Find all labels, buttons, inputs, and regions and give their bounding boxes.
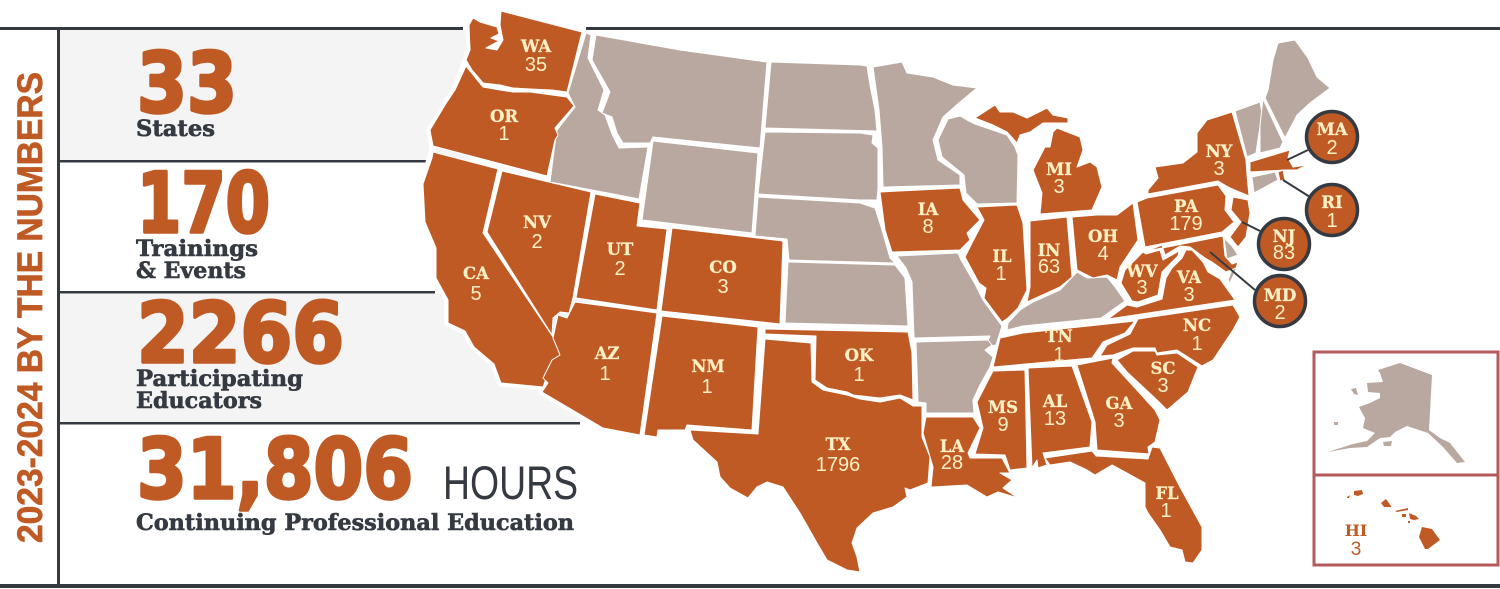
state: Florida bbox=[1045, 447, 1202, 563]
state: Virginia: VA bbox=[1176, 268, 1201, 287]
stat: 170 trainings and events: Trainings bbox=[136, 236, 258, 262]
state: Ohio: OH bbox=[1088, 227, 1118, 246]
state: Tennessee: 1 bbox=[1053, 344, 1065, 366]
callout: Maryland: MD bbox=[1264, 286, 1296, 305]
state: Oregon: 1 bbox=[498, 123, 510, 145]
state: California: 5 bbox=[470, 283, 482, 305]
state: New York: 3 bbox=[1213, 158, 1225, 180]
state: Pennsylvania bbox=[1137, 185, 1234, 247]
state: Pennsylvania: PA bbox=[1174, 197, 1198, 216]
state: Arizona bbox=[542, 302, 657, 435]
state: Illinois bbox=[965, 205, 1027, 322]
state: Texas bbox=[690, 339, 930, 572]
state: Rhode Island bbox=[1278, 170, 1285, 181]
map: states without events bbox=[550, 33, 1330, 413]
callout: Massachusetts bbox=[1287, 112, 1358, 162]
state: West Virginia: WV bbox=[1125, 262, 1159, 281]
stat: 31,806 hours: HOURS bbox=[443, 456, 578, 509]
state: Indiana: 63 bbox=[1038, 256, 1060, 278]
stat: 31,806 hours: 31,806 bbox=[137, 421, 413, 518]
state: Utah bbox=[576, 194, 667, 310]
state: North Carolina bbox=[1100, 305, 1240, 366]
state: South Carolina: 3 bbox=[1157, 375, 1169, 397]
callout: Maryland bbox=[1210, 252, 1306, 326]
state: Indiana: IN bbox=[1038, 241, 1060, 260]
state: Arizona: 1 bbox=[599, 363, 611, 385]
state: California bbox=[423, 152, 561, 387]
inset: Alaska bbox=[1328, 363, 1465, 463]
inset: Hawaii: 3 bbox=[1351, 539, 1361, 560]
state: Oregon bbox=[430, 66, 574, 176]
state: New Mexico bbox=[644, 316, 758, 437]
state: West Virginia bbox=[1121, 250, 1179, 302]
inset: Hawaii bbox=[1345, 490, 1440, 560]
state: Utah: UT bbox=[607, 240, 634, 259]
stat: 2266 participating educators bbox=[136, 285, 344, 414]
state: Virginia: 3 bbox=[1183, 284, 1195, 306]
inset: Hawaii: HI bbox=[1345, 521, 1367, 540]
stat: 170 trainings and events: & Events bbox=[136, 258, 246, 284]
state: Oregon: OR bbox=[490, 107, 518, 126]
state: Alabama: 13 bbox=[1044, 408, 1066, 430]
callout: Maryland: 2 bbox=[1274, 302, 1286, 324]
state: Iowa: IA bbox=[918, 200, 938, 219]
state: Michigan bbox=[975, 105, 1102, 214]
state: Georgia: GA bbox=[1106, 394, 1133, 413]
state: Florida: 1 bbox=[1160, 500, 1172, 522]
state: Nevada: NV bbox=[523, 213, 552, 232]
state: Virginia bbox=[1108, 250, 1235, 319]
state: Georgia bbox=[1077, 358, 1160, 454]
state: Washington: 35 bbox=[525, 54, 547, 76]
state: Pennsylvania: 179 bbox=[1169, 213, 1203, 235]
state: Tennessee bbox=[993, 321, 1135, 367]
state: Louisiana bbox=[923, 417, 1018, 498]
inset frame: Alaska and Hawaii bbox=[1314, 352, 1498, 565]
map: states with events bbox=[423, 11, 1307, 572]
state: Georgia: 3 bbox=[1113, 410, 1125, 432]
state: Colorado: 3 bbox=[717, 276, 729, 298]
state: Illinois: IL bbox=[992, 247, 1012, 266]
state: Ohio: 4 bbox=[1097, 243, 1109, 265]
state: Texas: 1796 bbox=[816, 454, 860, 476]
state: Mississippi bbox=[975, 370, 1027, 470]
callout: Rhode Island: 1 bbox=[1326, 210, 1338, 232]
stat: 31,806 hours bbox=[136, 421, 578, 536]
state: Oklahoma: 1 bbox=[853, 364, 865, 386]
state: Florida: FL bbox=[1155, 484, 1179, 503]
state: Oklahoma bbox=[765, 329, 913, 400]
state: Washington: WA bbox=[520, 37, 551, 56]
panel: states row background bbox=[60, 30, 470, 160]
state: Colorado bbox=[661, 228, 783, 324]
state: Colorado: CO bbox=[709, 258, 737, 277]
state: Oklahoma: OK bbox=[845, 346, 874, 365]
state: Arizona: AZ bbox=[594, 344, 619, 363]
stat: 170 trainings and events bbox=[136, 155, 270, 284]
state: Michigan: MI bbox=[1046, 160, 1072, 179]
state: New York bbox=[1148, 112, 1249, 196]
state: Washington bbox=[466, 11, 582, 92]
stat: 33 states: States bbox=[136, 116, 215, 142]
panel: educators row background bbox=[60, 294, 590, 422]
callout: Massachusetts: MA bbox=[1316, 120, 1348, 139]
state: Louisiana: LA bbox=[940, 437, 964, 456]
stat: 170 trainings and events: 170 bbox=[137, 155, 270, 252]
state: New Mexico: NM bbox=[691, 357, 725, 376]
state: Massachusetts bbox=[1250, 150, 1307, 172]
sidebar heading: 2023-2024 BY THE NUMBERS bbox=[11, 72, 50, 543]
state: Nevada: 2 bbox=[531, 231, 543, 253]
state: Utah: 2 bbox=[614, 258, 626, 280]
state: South Carolina: SC bbox=[1150, 359, 1176, 378]
state: Indiana bbox=[1027, 217, 1072, 302]
state: New Jersey bbox=[1230, 197, 1250, 247]
state: Ohio bbox=[1072, 203, 1138, 280]
stat: 2266 participating educators: 2266 bbox=[137, 285, 344, 382]
callout: New Jersey: NJ bbox=[1273, 227, 1296, 246]
state: Michigan: 3 bbox=[1053, 176, 1065, 198]
state: South Carolina bbox=[1117, 351, 1198, 410]
callout: Rhode Island: RI bbox=[1321, 193, 1343, 212]
state: Alabama bbox=[1028, 366, 1092, 468]
callout: Massachusetts: 2 bbox=[1326, 137, 1338, 159]
stat: 2266 participating educators: Participating bbox=[136, 366, 303, 392]
state: Illinois: 1 bbox=[995, 263, 1007, 285]
state: Mississippi: MS bbox=[988, 398, 1018, 417]
state: Tennessee: TN bbox=[1045, 327, 1073, 346]
state: Iowa: 8 bbox=[922, 216, 934, 238]
stat: 31,806 hours: Continuing Professional Education bbox=[136, 510, 574, 536]
stat: 33 states: 33 bbox=[137, 35, 237, 132]
state: New York: NY bbox=[1206, 142, 1233, 161]
state: West Virginia: 3 bbox=[1136, 277, 1148, 299]
state: Iowa bbox=[880, 188, 980, 252]
callout: New Jersey bbox=[1242, 218, 1310, 270]
state: North Carolina: NC bbox=[1183, 316, 1211, 335]
state: Nevada bbox=[487, 171, 591, 335]
state: Louisiana: 28 bbox=[941, 452, 963, 474]
stat: 2266 participating educators: Educators bbox=[136, 388, 262, 414]
state: Alabama: AL bbox=[1042, 392, 1068, 411]
callout: Rhode Island bbox=[1283, 180, 1358, 236]
state: California: CA bbox=[463, 264, 489, 283]
state: New Mexico: 1 bbox=[701, 376, 713, 398]
state: Maryland bbox=[1147, 236, 1238, 272]
state: Mississippi: 9 bbox=[997, 414, 1009, 436]
state: Texas: TX bbox=[825, 435, 851, 454]
callout: New Jersey: 83 bbox=[1273, 242, 1295, 264]
state: North Carolina: 1 bbox=[1191, 333, 1203, 355]
